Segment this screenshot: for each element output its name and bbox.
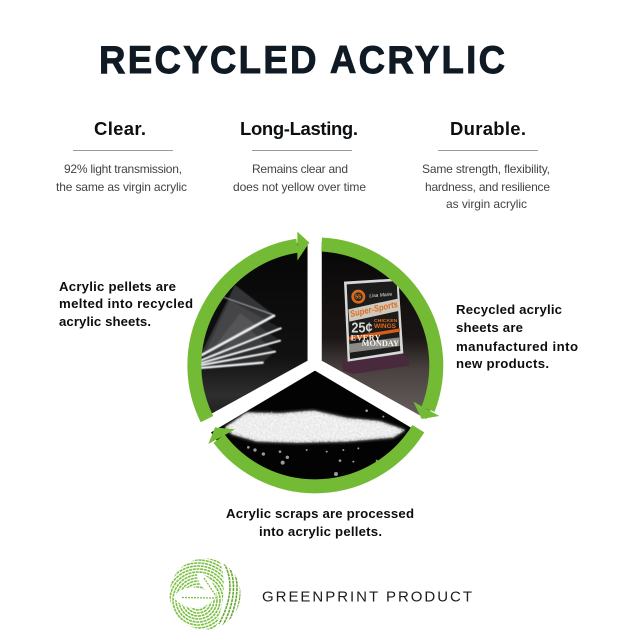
- acrylic sign: 55: [355, 295, 361, 301]
- heading: Durable: Durable.: [450, 118, 526, 139]
- description: Long-Lasting: [233, 162, 366, 194]
- infographic canvas: [56, 46, 578, 630]
- description: Clear: the same as virgin acrylic: [56, 180, 187, 194]
- acrylic sign: 25¢: [351, 321, 373, 337]
- description: Durable: hardness, and resilience: [425, 180, 550, 194]
- title: RECYCLED ACRYLIC: [99, 39, 505, 82]
- photo wedge: acrylic sheets: [201, 243, 308, 414]
- photo wedge: finished acrylic sign: [322, 242, 430, 419]
- label: melted into sheets: [59, 279, 193, 329]
- label: manufactured into products: manufactured into: [456, 339, 578, 354]
- description: Clear: [56, 162, 187, 194]
- label: scraps into pellets: [226, 506, 414, 539]
- photo wedge: acrylic pellets: [211, 370, 411, 480]
- description: Long-Lasting: does not yellow over time: [233, 180, 366, 194]
- arrow: sheets to products: [322, 244, 439, 419]
- recycling cycle diagram: [187, 232, 444, 494]
- logo: Greenprint leaf fingerprint: [170, 558, 240, 630]
- label: manufactured into products: Recycled acrylic: [456, 302, 562, 317]
- description: Durable: as virgin acrylic: [446, 197, 527, 211]
- label: melted into sheets: acrylic sheets.: [59, 314, 151, 329]
- acrylic sign: WINGS: [374, 323, 397, 330]
- column: Clear: [56, 118, 187, 194]
- acrylic sign: MONDAY: [362, 339, 399, 348]
- label: manufactured into products: [456, 302, 578, 371]
- label: scraps into pellets: Acrylic scraps are processed: [226, 506, 414, 521]
- arrow: pellets to sheets: [194, 232, 309, 419]
- column: Long-Lasting: [233, 118, 366, 194]
- label: manufactured into products: new products.: [456, 356, 549, 371]
- acrylic sign: Super-Sports: [349, 299, 399, 319]
- acrylic sign: CHICKEN: [374, 318, 398, 324]
- description: Durable: Same strength, flexibility,: [422, 162, 550, 176]
- description: Clear: 92% light transmission,: [64, 162, 182, 176]
- label: melted into sheets: Acrylic pellets are: [59, 279, 176, 294]
- column: Durable: [422, 118, 550, 211]
- label: scraps into pellets: into acrylic pellets.: [259, 524, 382, 539]
- label: melted into sheets: melted into recycled: [59, 296, 193, 311]
- description: Long-Lasting: Remains clear and: [252, 162, 348, 176]
- acrylic sign: [341, 278, 410, 374]
- description: Durable: [422, 162, 550, 211]
- arrow: products to pellets: [208, 427, 418, 486]
- heading: Clear: Clear.: [94, 118, 146, 139]
- heading: Long-Lasting: Long-Lasting.: [240, 118, 358, 139]
- label: manufactured into products: sheets are: [456, 320, 523, 335]
- acrylic sign: Lisa Marie: [369, 292, 393, 299]
- acrylic sign: EVERY: [351, 334, 381, 343]
- brand name: GREENPRINT PRODUCT: [262, 588, 472, 606]
